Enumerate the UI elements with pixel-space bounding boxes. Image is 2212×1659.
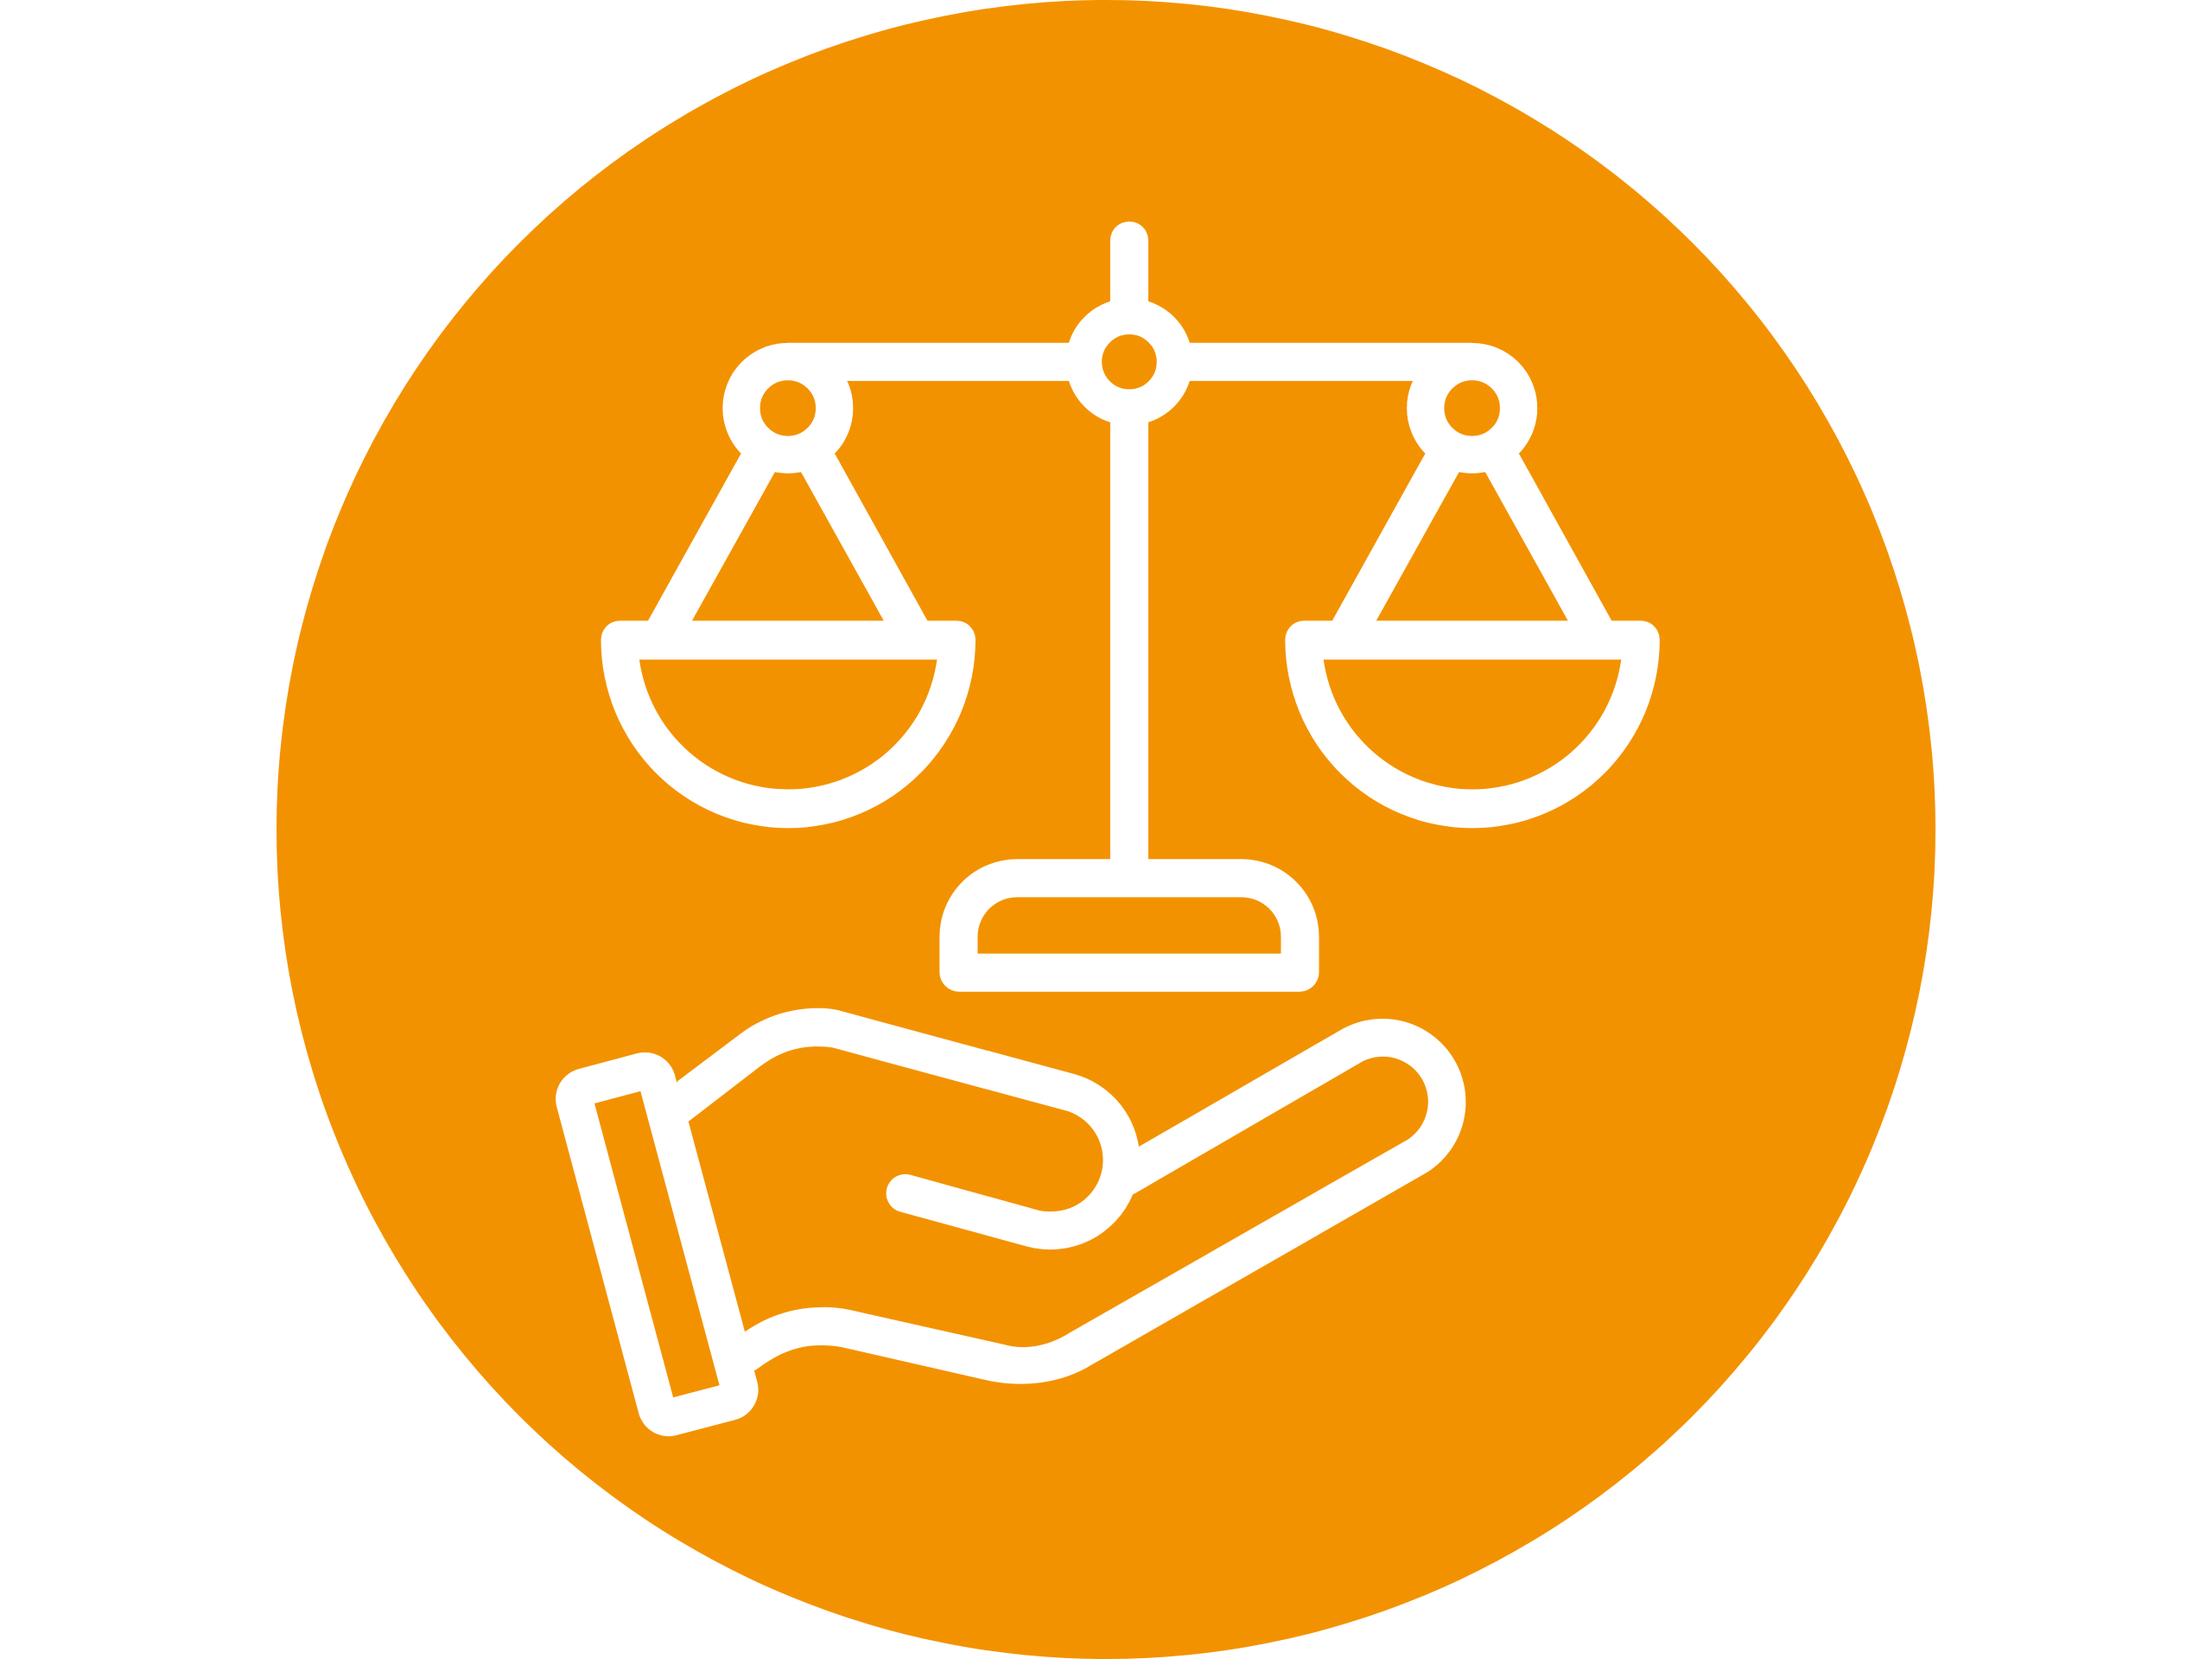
right pan assembly <box>1285 361 1660 828</box>
right hanger ring <box>1426 361 1519 454</box>
orange circle background <box>276 0 1936 1659</box>
scale crossbeam <box>788 343 1472 381</box>
right hanger chains <box>1332 444 1612 622</box>
hand holding up the scale <box>587 1008 1465 1405</box>
left hanger ring <box>741 361 835 454</box>
left pan assembly <box>601 361 976 828</box>
scale base <box>939 859 1319 992</box>
sleeve cuff interior <box>594 1091 720 1397</box>
sleeve cuff <box>587 1084 728 1405</box>
scale: balance with two pans <box>601 221 1660 992</box>
right pan bowl <box>1285 620 1660 828</box>
hand outline <box>666 1008 1465 1384</box>
centre pivot ring <box>1084 316 1175 407</box>
left hanger chains <box>647 444 928 622</box>
scale stem <box>1110 221 1148 868</box>
left pan bowl <box>601 620 976 828</box>
